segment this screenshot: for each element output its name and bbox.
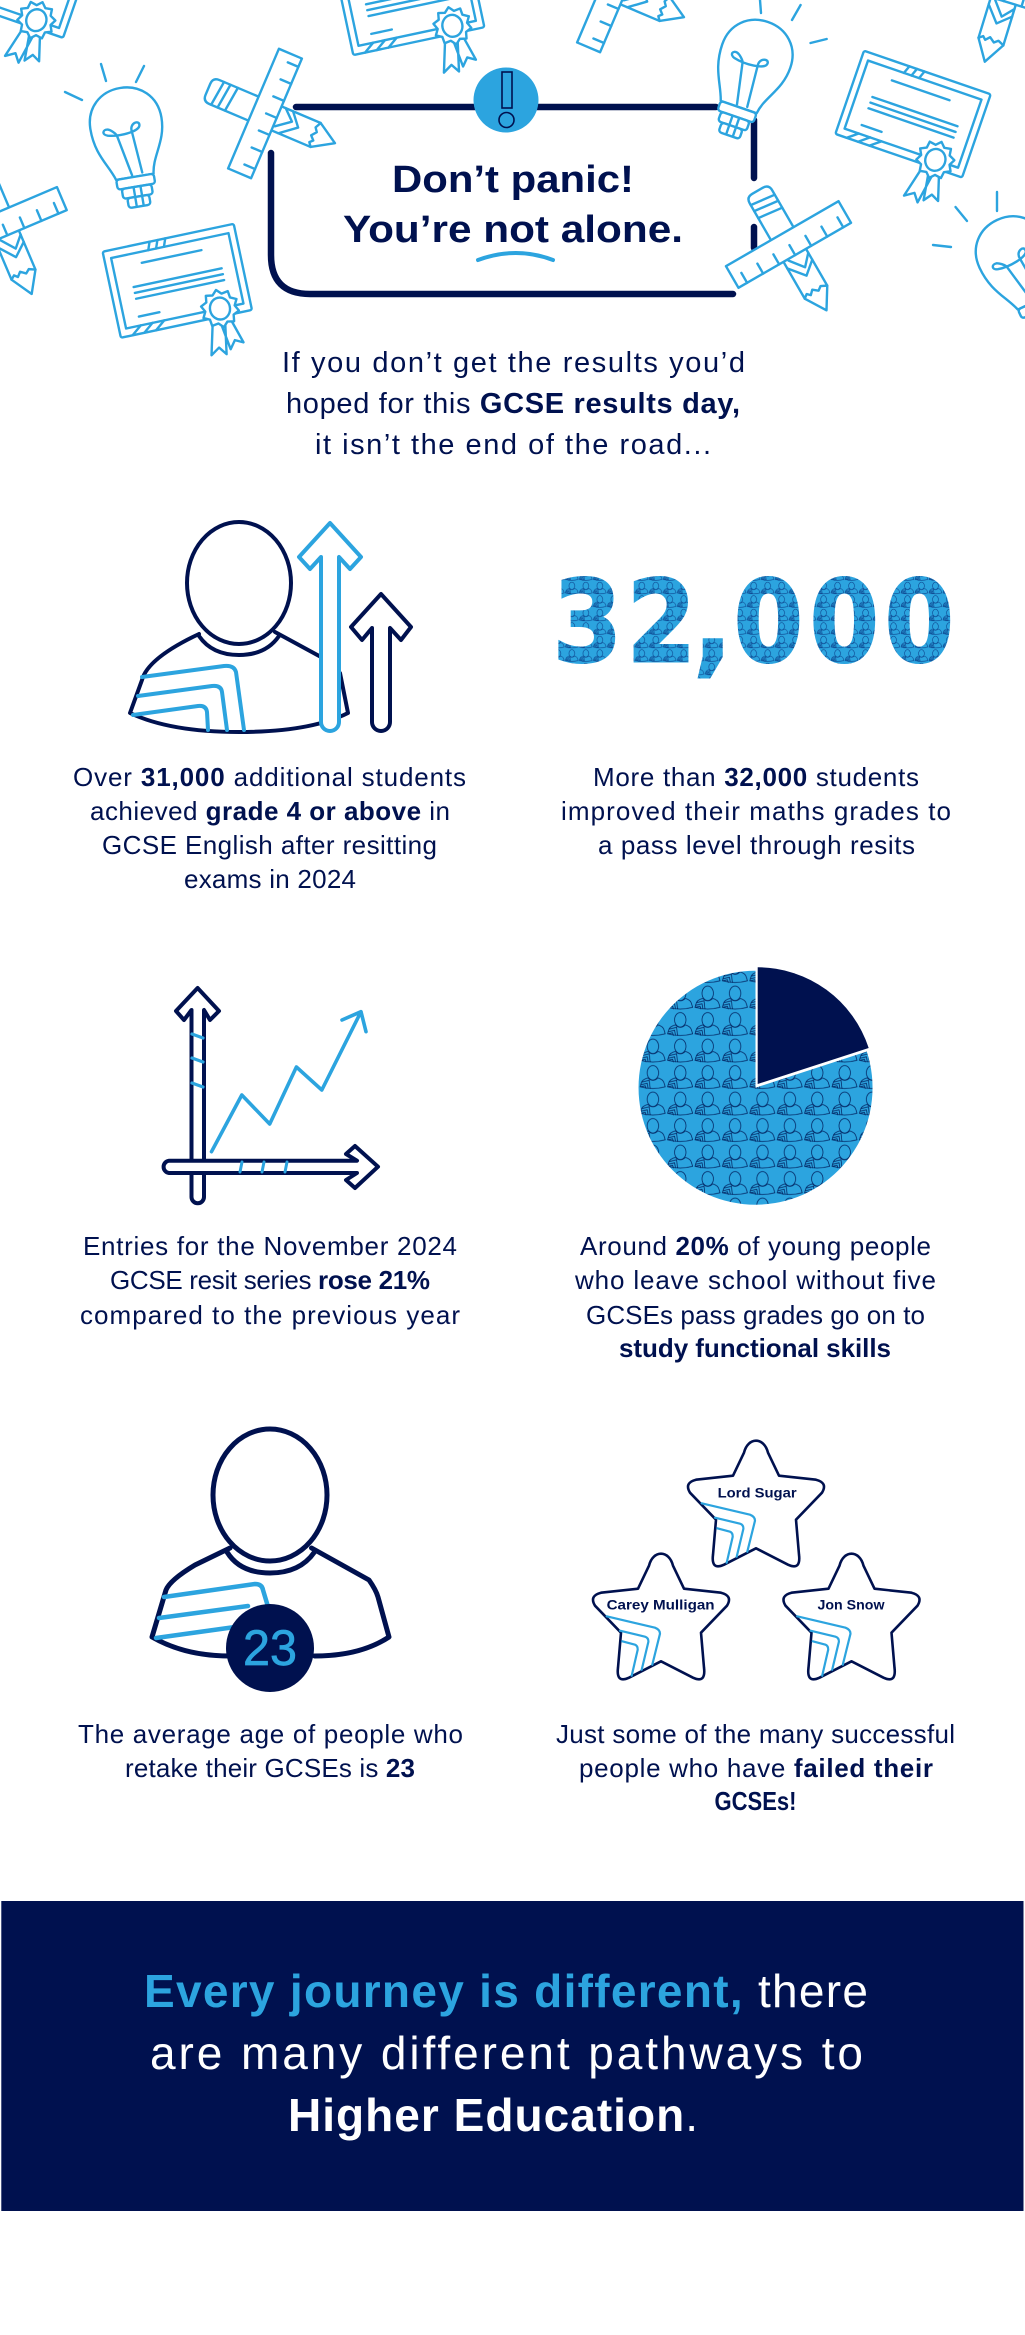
title: You’re not alone.: [343, 209, 683, 251]
banner: every journey is different: [1, 1901, 1024, 2211]
text block: GCSE English after resitting: [102, 830, 437, 860]
star: Jon Snow: [784, 1554, 920, 1679]
text block: Entries for the November 2024: [83, 1231, 457, 1261]
icon: certificate top left: [0, 0, 92, 74]
decorative doodle background: [0, 0, 1025, 375]
intro text: [282, 347, 745, 461]
icon: ruler and pencil over box corner: [183, 29, 360, 203]
star: Lord Sugar: [688, 1441, 824, 1566]
swoosh under title: [478, 253, 553, 260]
text block: [561, 762, 951, 860]
text block: study functional skills: [619, 1333, 891, 1363]
text block: GCSEs!: [714, 1786, 796, 1816]
banner text: are many different pathways to: [150, 2027, 863, 2079]
star: Carey Mulligan: [593, 1554, 729, 1679]
panel: November resit entries: [80, 988, 460, 1330]
text block: [574, 1231, 936, 1363]
text block: a pass level through resits: [598, 830, 915, 860]
text block: [556, 1719, 955, 1816]
text block: Just some of the many successful: [556, 1719, 955, 1749]
title: Don’t panic!: [392, 159, 634, 201]
banner text: [144, 1965, 868, 2141]
icon: exclamation mark badge: [474, 68, 538, 132]
panel: maths resits: [553, 557, 954, 860]
callout box: don't panic: [183, 0, 883, 343]
icon: ruler and pencil left edge: [0, 142, 92, 319]
intro text: hoped for this GCSE results day,: [286, 388, 740, 420]
icon: certificate lower left: [103, 224, 260, 375]
icon: ruler and pencil over box edge: [701, 158, 883, 343]
icon: three stars with names: [593, 1441, 920, 1679]
intro text: it isn’t the end of the road...: [315, 429, 711, 461]
text block: Around 20% of young people: [580, 1231, 931, 1261]
icon: certificate top centre: [335, 0, 492, 92]
text block: [80, 1231, 460, 1330]
text block: GCSE resit series rose 21%: [110, 1265, 430, 1295]
text block: The average age of people who: [78, 1719, 463, 1749]
icon: student with age badge: 23: [243, 1620, 297, 1676]
panel: functional skills pie chart: [574, 967, 936, 1363]
panel: additional students in English: [73, 522, 466, 894]
text block: retake their GCSEs is 23: [125, 1753, 415, 1783]
text block: compared to the previous year: [80, 1300, 460, 1330]
text block: GCSEs pass grades go on to: [586, 1300, 925, 1330]
panel: successful people who failed: [556, 1441, 955, 1816]
intro text: If you don’t get the results you’d: [282, 347, 745, 379]
icon: light bulb far right: [933, 192, 1025, 344]
text block: who leave school without five: [574, 1265, 936, 1295]
text block: improved their maths grades to: [561, 796, 951, 826]
text block: [78, 1719, 463, 1783]
icon: student with two up arrows: [130, 522, 411, 732]
icon: light bulb left: [65, 64, 175, 212]
icon: certificate right: [823, 51, 991, 213]
banner text: Every journey is different, there: [144, 1965, 868, 2017]
text block: Over 31,000 additional students: [73, 762, 466, 792]
text block: [73, 762, 466, 894]
banner text: Higher Education.: [288, 2089, 698, 2141]
big number: 32,000 with people pattern: 32,000: [553, 557, 954, 688]
text block: More than 32,000 students: [593, 762, 919, 792]
text block: exams in 2024: [184, 864, 356, 894]
title: [343, 159, 683, 251]
text block: people who have failed their: [579, 1753, 933, 1783]
pie chart: [639, 967, 873, 1205]
icon: pencil top right: [923, 0, 1025, 81]
line chart icon with axes: [164, 988, 378, 1203]
panel: average age: [78, 1429, 463, 1783]
icon: student with age badge: [152, 1429, 389, 1692]
star: Lord Sugar: Lord Sugar: [718, 1486, 797, 1500]
text block: achieved grade 4 or above in: [90, 796, 450, 826]
star: Jon Snow: Jon Snow: [818, 1598, 885, 1612]
star: Carey Mulligan: Carey Mulligan: [607, 1598, 715, 1612]
icon: light bulb over box corner: [695, 0, 827, 147]
icon: ruler and pencil top centre: [532, 0, 709, 77]
